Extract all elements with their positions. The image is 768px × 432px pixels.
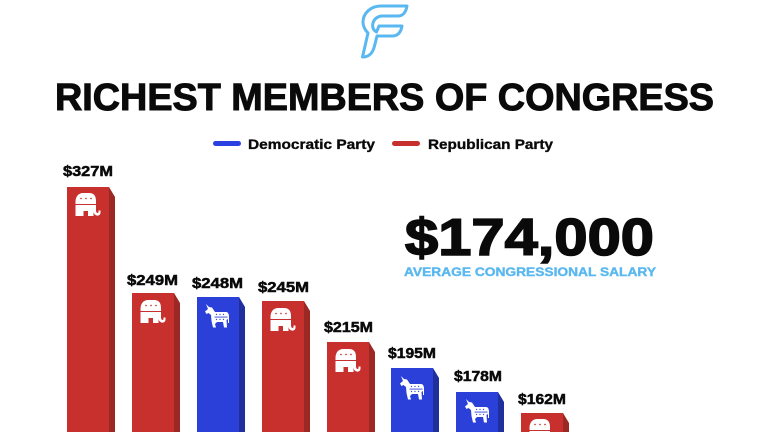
salary figure: $174,000 (405, 209, 654, 267)
salary caption: AVERAGE CONGRESSIONAL SALARY (404, 265, 656, 279)
salary callout (404, 209, 656, 279)
bar: $249M Republican: $249M (127, 273, 178, 289)
icon: donkey (205, 304, 229, 328)
icon: donkey (400, 376, 424, 400)
bar: $248M Democratic (192, 276, 245, 432)
bar: $215M Republican (324, 320, 375, 432)
title: RICHEST MEMBERS OF CONGRESS (55, 77, 714, 119)
icon: elephant (76, 193, 100, 216)
bar: $245M Republican: $245M (258, 280, 309, 296)
bar: $162M Republican: $162M (518, 392, 566, 408)
bar: $327M Republican: $327M (63, 164, 113, 180)
icon: elephant (270, 308, 296, 331)
legend key: Democratic Party (213, 141, 241, 146)
bar: $245M Republican (258, 280, 310, 432)
bar: $178M Democratic: $178M (454, 369, 502, 385)
bar: $195M Democratic (388, 346, 439, 432)
bar: $249M Republican (127, 273, 180, 432)
legend key: Republican Party (392, 141, 420, 146)
icon: donkey (465, 399, 489, 422)
bar: $327M Republican (63, 164, 115, 432)
bar: $248M Democratic: $248M (192, 276, 243, 292)
legend label: Republican Party: Republican Party (428, 136, 553, 152)
icon: F logo (362, 6, 407, 57)
bar: $215M Republican: $215M (324, 320, 373, 336)
legend label: Democratic Party: Democratic Party (248, 136, 375, 152)
legend (213, 136, 553, 152)
bar: $178M Democratic (454, 369, 504, 432)
icon: elephant (336, 349, 360, 372)
icon: elephant (530, 419, 554, 432)
bar: $195M Democratic: $195M (388, 346, 436, 362)
icon: elephant (140, 300, 166, 323)
bar: $162M Republican (518, 392, 569, 432)
